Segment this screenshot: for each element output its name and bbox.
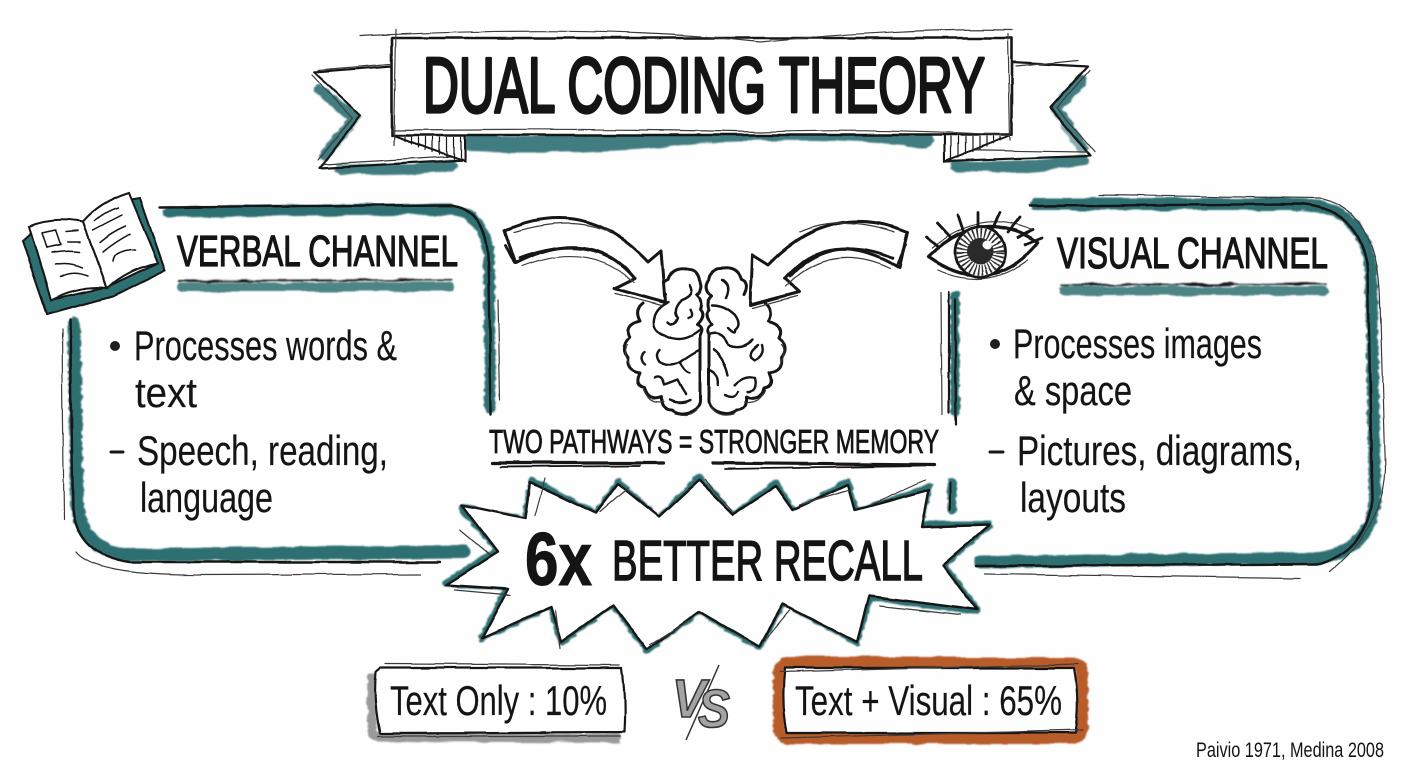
panel: verbal channel (22, 193, 500, 575)
heading underline (1060, 284, 1326, 291)
heading underline (179, 280, 452, 287)
panel: visual channel (926, 195, 1385, 578)
comparison: text plus visual box: Text + Visual : 65% (795, 677, 1062, 724)
comparison: text plus visual box (779, 663, 1082, 738)
label: two pathways equals stronger memory (489, 423, 939, 469)
recall multiplier: 6x (525, 517, 592, 601)
right ribbon tail (945, 62, 1090, 161)
banner main rectangle (392, 38, 1012, 135)
comparison: text only box (372, 664, 625, 738)
panel frame (952, 204, 1375, 562)
icon: versus (672, 665, 730, 740)
icon: open book (22, 193, 165, 314)
icon: brain left hemisphere (624, 269, 702, 415)
ribbon folds (392, 135, 465, 161)
bullet list: Speech, reading, (137, 427, 388, 474)
title banner (312, 30, 1094, 169)
label: two pathways equals stronger memory: TWO PATHWAYS = STRONGER MEMORY (489, 423, 939, 460)
bullet list: text (135, 369, 197, 416)
left ribbon tail (314, 66, 465, 168)
bullet list: Processes words & (134, 322, 397, 369)
title text: DUAL CODING THEORY (423, 41, 985, 129)
icon: versus: S (698, 679, 730, 739)
callout: 6x better recall starburst (446, 477, 989, 650)
bullet list: Processes images (1013, 320, 1262, 367)
comparison: text only box: Text Only : 10% (390, 677, 607, 724)
icon: eye (926, 212, 1042, 279)
bullet list: & space (1014, 367, 1132, 414)
banner teal brush shadows (320, 80, 1084, 169)
icon: brain right hemisphere (707, 269, 785, 415)
bullet list: Pictures, diagrams, (1017, 427, 1302, 474)
heading: verbal channel: VERBAL CHANNEL (177, 227, 458, 276)
bullet list (990, 320, 1302, 521)
bullet list: layouts (1020, 474, 1126, 521)
arrow: verbal to brain (505, 218, 665, 305)
panel frame (74, 209, 490, 555)
recall label: BETTER RECALL (612, 529, 923, 593)
arrow: visual to brain (750, 221, 908, 308)
bullet list (110, 322, 397, 521)
icon: versus: V (672, 669, 710, 729)
bullet list: language (140, 474, 273, 521)
brain with arrows (505, 218, 908, 415)
